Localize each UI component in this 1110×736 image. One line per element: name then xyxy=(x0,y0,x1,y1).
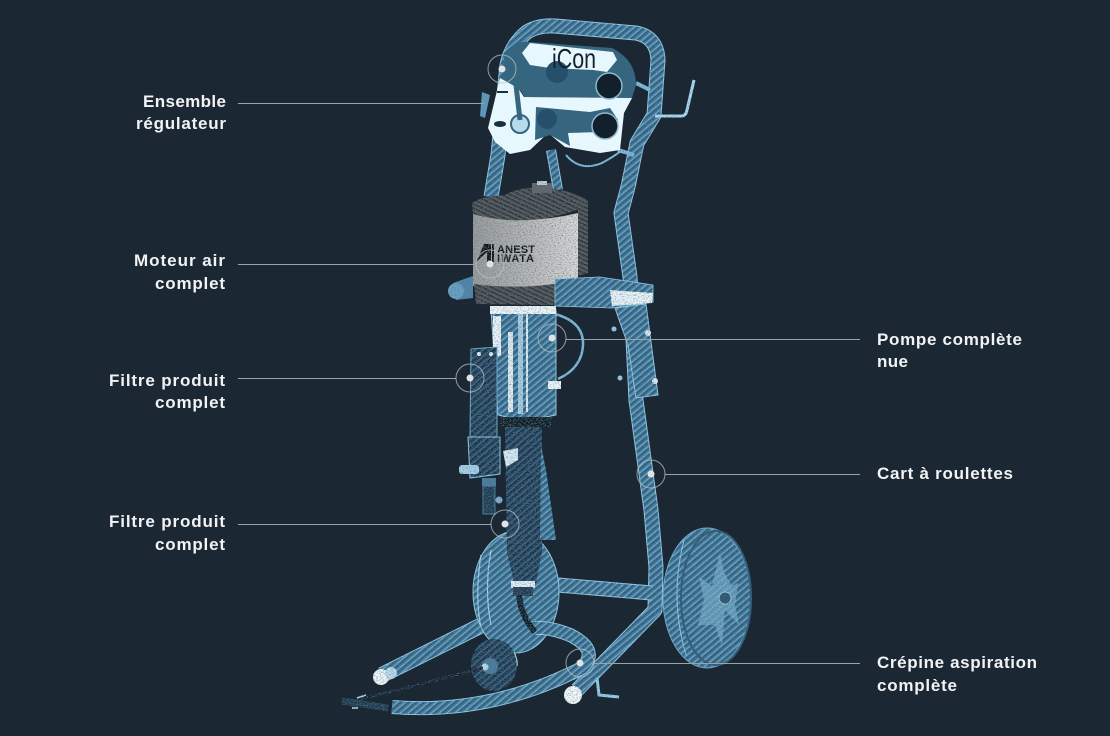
label: Cart à roulettes xyxy=(637,460,1013,488)
logo: IWATA xyxy=(497,253,534,265)
machine structure xyxy=(342,26,751,708)
label: Pompe complète nue xyxy=(538,324,1022,371)
label: Filtre produit complet (lower) xyxy=(109,510,519,554)
label: Moteur air complet: complet xyxy=(155,274,225,293)
label: Pompe complète nue: Pompe complète xyxy=(877,330,1022,349)
label: Filtre produit complet (lower): Filtre produit xyxy=(109,512,225,531)
cart frame tubes xyxy=(491,26,694,690)
regulator panel xyxy=(480,42,636,154)
wheel stand foot xyxy=(597,678,619,697)
label: Ensemble régulateur: Ensemble xyxy=(143,92,226,111)
label: Pompe complète nue: nue xyxy=(877,352,908,371)
label: Cart à roulettes: Cart à roulettes xyxy=(877,464,1013,483)
pump cylinder xyxy=(490,306,583,427)
pump lower rod xyxy=(503,427,556,632)
label: Crépine aspiration complète: complète xyxy=(877,676,957,695)
logo xyxy=(476,244,535,265)
base loop xyxy=(373,531,589,708)
regulator panel: iCon xyxy=(552,43,596,74)
small disc and hose xyxy=(342,639,517,708)
label: Filtre produit complet (lower): complet xyxy=(155,535,225,554)
label: Filtre produit complet (upper) xyxy=(109,364,484,412)
label: Moteur air complet xyxy=(134,250,504,293)
logo: ANEST xyxy=(497,244,535,256)
label: Moteur air complet: Moteur air xyxy=(134,251,225,270)
label: Filtre produit complet (upper): Filtre produit xyxy=(109,371,225,390)
pump machine illustration xyxy=(342,26,751,708)
label: Ensemble régulateur: régulateur xyxy=(136,114,226,133)
label: Crépine aspiration complète xyxy=(566,649,1037,695)
air motor xyxy=(448,181,653,308)
label: Filtre produit complet (upper): complet xyxy=(155,393,225,412)
fluid filter xyxy=(459,347,502,514)
wheel xyxy=(663,528,751,668)
label: Ensemble régulateur xyxy=(136,55,516,133)
label: Crépine aspiration complète: Crépine aspiration xyxy=(877,653,1037,672)
